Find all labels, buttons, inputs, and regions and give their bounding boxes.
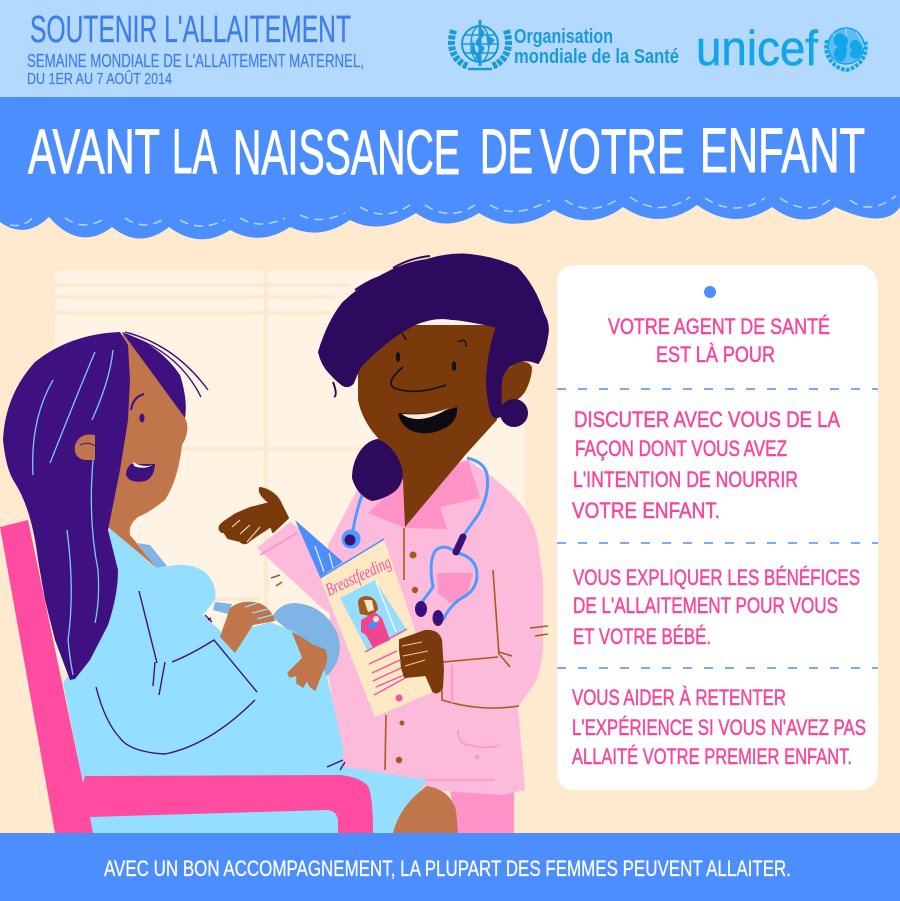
- WHO wordmark: [514, 26, 679, 68]
- booklet blue cover: [295, 520, 343, 577]
- trousers: [450, 790, 514, 833]
- banner heading: DE: [480, 117, 533, 187]
- hair highlights: [33, 350, 113, 675]
- pocket fill: [437, 573, 473, 603]
- coat sleeve: [257, 522, 350, 620]
- photo: mother and baby: [358, 596, 390, 648]
- patient lower hand: [288, 633, 326, 690]
- doctor hand on booklet: [400, 631, 443, 692]
- WHO wordmark: Organisation: [514, 26, 613, 48]
- unicef wordmark: unicef: [696, 22, 818, 76]
- patient ear: [75, 434, 95, 460]
- doctor neck and face: [358, 325, 498, 527]
- header subtitle: DU 1ER AU 7 AOÛT 2014: [27, 71, 172, 88]
- doctor hair: [319, 255, 548, 417]
- card item 2: [573, 565, 860, 649]
- stethoscope: [343, 458, 488, 626]
- WHO wordmark: mondiale de la Santé: [514, 46, 679, 68]
- footer band: [0, 833, 900, 901]
- lab coat: [328, 460, 543, 795]
- patient gown: [63, 527, 427, 833]
- booklet title: Breastfeeding: [322, 552, 394, 600]
- header band: [0, 0, 900, 100]
- window: [55, 271, 525, 671]
- hair curls: [333, 256, 543, 397]
- hair buns: [353, 400, 527, 500]
- header subtitle: [27, 51, 364, 88]
- patient fringe: [122, 332, 186, 418]
- under-arm sleeve: [272, 603, 340, 678]
- card item 1: FAÇON DONT VOUS AVEZ: [575, 436, 787, 461]
- patient upper hand: [220, 602, 275, 653]
- card item 3: [572, 685, 866, 769]
- doctor illustration: [219, 255, 548, 833]
- card item 1: DISCUTER AVEC VOUS DE LA: [574, 407, 840, 432]
- card item 2: ET VOTRE BÉBÉ.: [573, 624, 711, 649]
- patient knee: [393, 786, 458, 833]
- icon: WHO emblem: [452, 20, 508, 69]
- banner heading: [28, 116, 865, 188]
- booklet photo: [340, 580, 407, 650]
- banner heading: AVANT: [28, 117, 160, 187]
- doctor raised hand: [219, 488, 288, 543]
- header subtitle: SEMAINE MONDIALE DE L'ALLAITEMENT MATERNEL,: [27, 51, 364, 71]
- banner heading: NAISSANCE: [233, 118, 460, 188]
- banner heading: VOTRE: [540, 117, 685, 187]
- card heading: EST LÀ POUR: [656, 342, 775, 367]
- doctor ear: [500, 362, 532, 407]
- card heading: VOTRE AGENT DE SANTÉ: [608, 314, 830, 339]
- doctor mouth: [398, 407, 457, 433]
- booklet: [320, 539, 433, 717]
- gown lines: [96, 591, 345, 770]
- header title: SOUTENIR L'ALLAITEMENT: [30, 9, 351, 51]
- coat details: [271, 528, 548, 770]
- doctor nose: [391, 367, 446, 391]
- doctor eyes and brows: [396, 333, 466, 371]
- patient eye and brow: [140, 414, 144, 422]
- coat buttons: [396, 552, 418, 763]
- info card: [557, 265, 878, 790]
- icon: UNICEF emblem: [826, 28, 866, 70]
- patient illustration: [0, 332, 458, 833]
- collar: [368, 460, 480, 529]
- patient hair: [3, 332, 130, 680]
- banner heading: LA: [172, 117, 217, 187]
- chair: [0, 520, 373, 833]
- card pin: [704, 286, 716, 298]
- card item 1: VOTRE ENFANT.: [572, 498, 720, 523]
- card item 3: VOUS AIDER À RETENTER: [572, 685, 786, 710]
- patient mouth: [126, 464, 155, 482]
- patient face: [108, 332, 187, 568]
- card heading: [608, 314, 830, 367]
- gown collar: [137, 543, 167, 568]
- booklet dot: [396, 694, 402, 702]
- card item 1: L'INTENTION DE NOURRIR: [573, 467, 798, 492]
- card item 1: [572, 407, 840, 523]
- hair wisps: [15, 332, 208, 632]
- title banner: [0, 97, 900, 239]
- booklet text lines: [369, 651, 407, 695]
